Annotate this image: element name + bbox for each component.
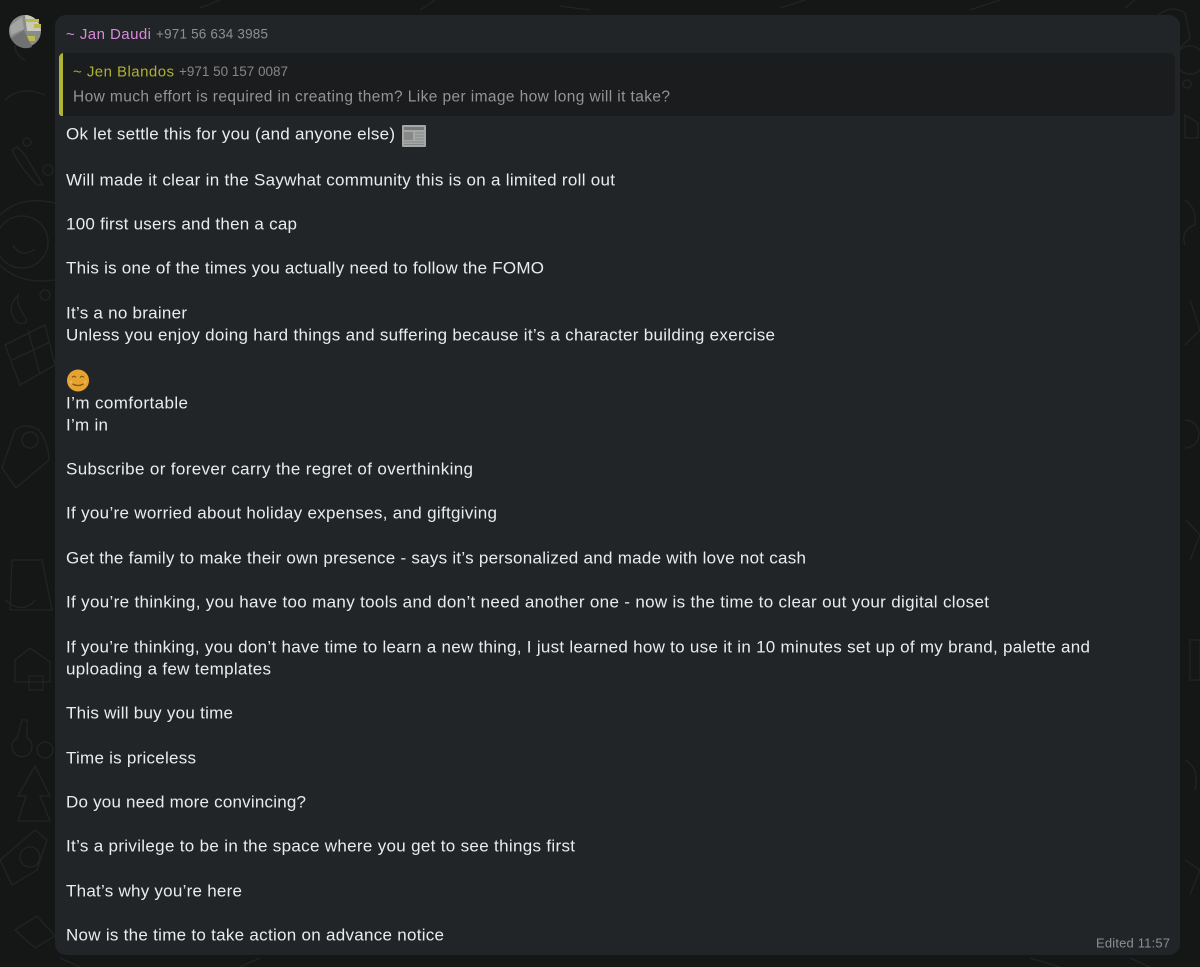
message text: I’m comfortable xyxy=(66,394,188,412)
message text: It’s a privilege to be in the space where you get to see things first xyxy=(66,836,575,856)
sender name and phone: +971 56 634 3985 xyxy=(156,26,268,42)
message text: Time is priceless xyxy=(66,748,196,768)
message text: Now is the time to take action on advance notice xyxy=(66,926,444,944)
message text xyxy=(66,124,1090,944)
icon: newspaper emoji xyxy=(402,125,426,147)
message text: I’m in xyxy=(66,416,108,434)
message text: If you’re thinking, you have too many tools and don’t need another one - now is the time to clear out your digital closet xyxy=(66,592,989,612)
message text: Unless you enjoy doing hard things and suffering because it’s a character building exercise xyxy=(66,326,775,344)
quoted reply: ~ Jen Blandos xyxy=(73,64,174,80)
message text: This will buy you time xyxy=(66,704,233,722)
sender name and phone: ~ Jan Daudi xyxy=(66,26,151,43)
message text: Will made it clear in the Saywhat community this is on a limited roll out xyxy=(66,170,615,190)
message text: It’s a no brainer xyxy=(66,304,187,322)
message text: Ok let settle this for you (and anyone else) xyxy=(66,124,395,144)
message text: If you’re thinking, you don’t have time to learn a new thing, I just learned how to use it in 10 minutes set up of my brand, palette and xyxy=(66,638,1090,656)
icon: smiling emoji xyxy=(67,370,89,392)
timestamp: Edited 11:57 xyxy=(1096,936,1170,950)
message text: Subscribe or forever carry the regret of overthinking xyxy=(66,460,473,478)
message text: Get the family to make their own presence - says it’s personalized and made with love not cash xyxy=(66,548,806,568)
quoted reply: How much effort is required in creating them? Like per image how long will it take? xyxy=(73,88,670,106)
quoted reply xyxy=(59,53,1175,116)
message text: uploading a few templates xyxy=(66,660,271,678)
message text: If you’re worried about holiday expenses, and giftgiving xyxy=(66,504,497,522)
message text: This is one of the times you actually need to follow the FOMO xyxy=(66,258,544,278)
message text: 100 first users and then a cap xyxy=(66,214,297,234)
message text: Do you need more convincing? xyxy=(66,792,306,812)
avatar xyxy=(9,15,41,48)
quoted reply: +971 50 157 0087 xyxy=(179,64,288,79)
message text: That’s why you’re here xyxy=(66,882,242,900)
sender name and phone xyxy=(66,26,268,43)
